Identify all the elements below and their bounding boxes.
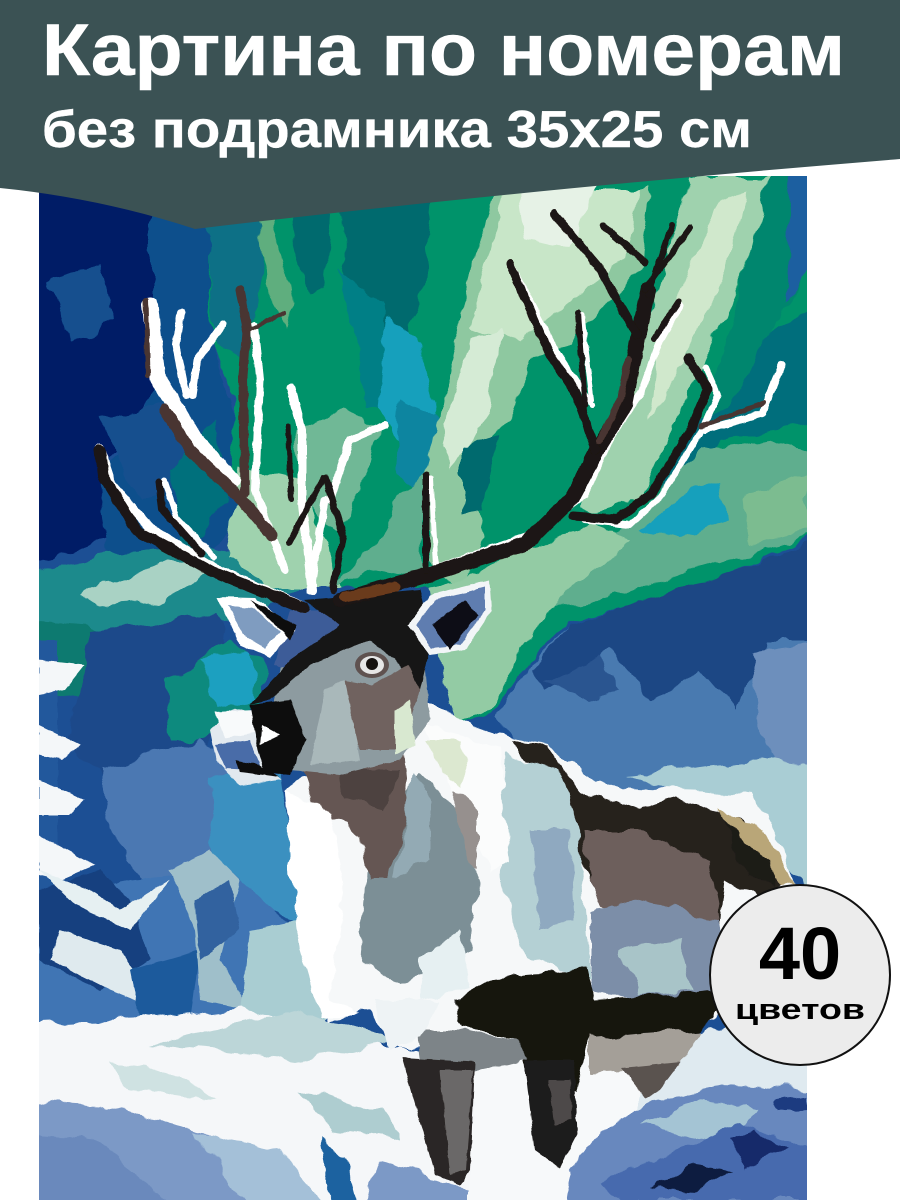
green aurora [205,160,830,722]
muzzle [210,708,282,786]
brown throat [300,755,410,880]
head [210,590,432,786]
badge: 40 colours: цветов [735,994,865,1026]
antler beams [100,214,708,608]
snowy trees on the left [39,640,327,1026]
distant blue hills on the right [494,540,807,884]
eye [355,652,389,678]
subtitle: без подрамника 35х25 см [42,101,752,159]
rump and back [510,740,785,930]
reindeer body [285,700,795,1090]
white chest [285,790,360,1015]
badge: 40 colours [710,885,890,1065]
brown antler shafts [146,290,764,597]
antler snow highlights [100,265,782,605]
mint below the right antler [430,525,630,720]
right ear [408,580,492,655]
snowy ground [20,1010,830,1200]
shoulder [500,755,590,980]
mint band centre [425,190,650,590]
header banner [0,0,900,229]
night sky background [39,192,807,1094]
badge: 40 colours: 40 [759,912,841,995]
antlers [100,214,782,608]
nose [250,700,306,775]
reindeer [210,580,795,1185]
title: Картина по номерам [42,10,845,91]
legs [402,1058,681,1185]
mint band right [575,176,770,515]
mint left of centre [225,470,340,590]
grey neck [360,770,480,985]
painting: reindeer under the aurora [20,160,830,1200]
belly [456,970,725,1090]
left ear [217,597,296,658]
